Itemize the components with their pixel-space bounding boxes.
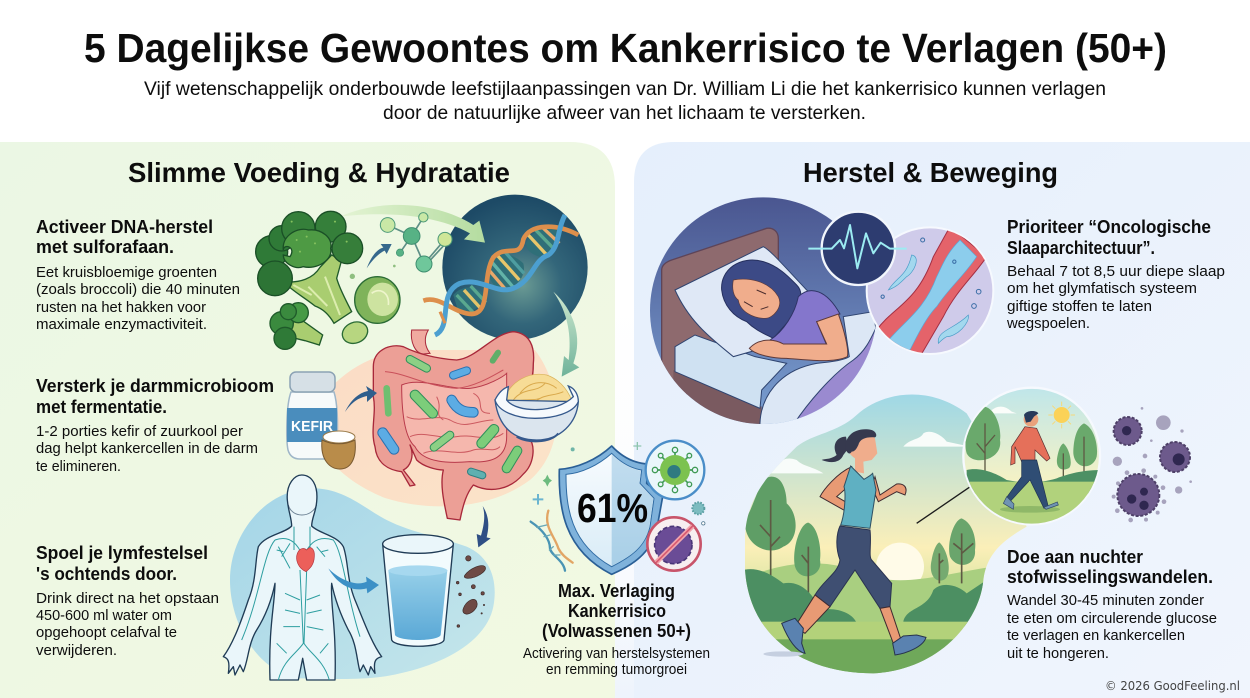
- arrow: dark arrow down: [477, 506, 491, 547]
- icon: heartbeat monitor: [808, 212, 907, 285]
- icon: blanket: [760, 312, 880, 430]
- body: Wandel 30-45 minuten zonder: [1007, 593, 1204, 609]
- heading: Versterk je darmmicrobioom: [36, 376, 274, 396]
- icon: purple blanket fold: [796, 328, 876, 419]
- body: dag helpt kankercellen in de darm: [36, 441, 258, 457]
- illustration: sleeping woman: [650, 197, 993, 430]
- icon: hills: [740, 563, 993, 627]
- body: [1006, 264, 1225, 332]
- illustration: intestine: [373, 330, 578, 520]
- inset trees: [965, 407, 1097, 470]
- body: te eten om circulerende glucose: [1007, 611, 1217, 627]
- subtitle: Vijf wetenschappelijk onderbouwde leefstijlaanpassingen van Dr. William Li die het kankerrisico kunnen verlagen: [144, 78, 1106, 100]
- heading: [36, 217, 213, 257]
- stat label description: [523, 646, 710, 678]
- heading: Activeer DNA-herstel: [36, 217, 213, 237]
- icon: walker inset circle: [963, 388, 1103, 525]
- icon: hair: [722, 260, 801, 338]
- stat label heading: Kankerrisico: [568, 601, 666, 621]
- icon: human body: [223, 475, 382, 680]
- icon: bushes: [740, 569, 987, 627]
- runner rear arm: [820, 467, 865, 518]
- illustration: 61 percent shield: [531, 441, 705, 574]
- illustration: lymph system and water: [223, 475, 495, 680]
- icon: virus lens: [646, 441, 704, 499]
- stat label description: en remming tumorgroei: [546, 662, 687, 678]
- icon: jar body: [287, 392, 338, 459]
- stat label: [523, 581, 710, 678]
- illustration: blue background blob: [230, 488, 495, 679]
- text block: activeer DNA-herstel: [36, 217, 240, 333]
- icon: blocked cancer cell: [647, 517, 701, 571]
- body: te verlagen en kankercellen: [1007, 628, 1185, 644]
- icon: shadow: [763, 651, 803, 657]
- icon: night circle: [650, 197, 877, 424]
- body: Drink direct na het opstaan: [36, 591, 219, 607]
- text block: oncologische slaaparchitectuur: [1006, 217, 1225, 332]
- text block: versterk je darmmicrobioom: [36, 376, 274, 475]
- heading: [1007, 217, 1211, 258]
- icon: sprout slice: [339, 318, 371, 347]
- icon: headboard: [662, 228, 778, 397]
- text block: stofwisselingswandelen: [1007, 547, 1217, 662]
- icon: teal germ: [692, 502, 704, 514]
- runner front arm: [872, 477, 906, 502]
- heading: Slaaparchitectuur”.: [1007, 238, 1155, 258]
- icon: molecule: [380, 213, 452, 272]
- icon: DNA mini: [531, 511, 573, 571]
- heading: Prioriteer “Oncologische: [1007, 217, 1211, 237]
- body: 450-600 ml water om: [36, 608, 172, 624]
- heading: herstel en beweging: Herstel & Beweging: [803, 157, 1058, 188]
- body: maximale enzymactiviteit.: [36, 317, 207, 333]
- icon: trees: [745, 477, 975, 593]
- inset bushes and grass: [967, 469, 1103, 493]
- icon: shield: [559, 446, 663, 574]
- runner ponytail: [822, 437, 848, 462]
- icon: kefir jar: [287, 372, 338, 459]
- heading: Doe aan nuchter: [1007, 547, 1143, 567]
- arrow: kefir to intestine: [345, 386, 377, 412]
- runner leggings: [815, 526, 892, 608]
- body: [1007, 593, 1217, 662]
- stat label heading: Max. Verlaging: [558, 581, 675, 601]
- heading: [36, 543, 208, 584]
- icon: esophagus: [411, 330, 430, 354]
- body: om het glymfatisch systeem: [1007, 281, 1197, 297]
- body: Eet kruisbloemige groenten: [36, 265, 217, 281]
- body: opgehoopt celafval te: [36, 625, 177, 641]
- icon: sparkles: [533, 442, 641, 505]
- runner legs: [795, 595, 902, 643]
- icon: jar label: [287, 408, 337, 442]
- icon: arm: [749, 314, 848, 361]
- heading: [1007, 547, 1213, 587]
- icon: face: [733, 279, 780, 318]
- heading: stofwisselingswandelen.: [1007, 567, 1213, 587]
- inset sun: [1048, 402, 1075, 428]
- text block: spoel je lymfestelsel: [36, 543, 219, 659]
- icon: small broccoli: [270, 303, 323, 349]
- label text: KEFIR: [291, 418, 333, 435]
- broccoli stem: [283, 255, 352, 323]
- icon: jar lid: [290, 372, 335, 392]
- subtitle: [144, 78, 1106, 124]
- heading: met sulforafaan.: [36, 237, 174, 257]
- icon: DNA helix: [423, 215, 578, 335]
- icon: large broccoli: [256, 211, 363, 323]
- icon: grass path: [761, 622, 968, 640]
- icon: colon outline: [373, 332, 534, 520]
- illustration: park background blob: [745, 395, 1027, 673]
- arrow: green arrow to intestine: [553, 292, 579, 377]
- icon: shield inner: [566, 453, 654, 567]
- icon: heart: [297, 548, 314, 572]
- icon: runner woman: [782, 429, 926, 655]
- inset walker: [1003, 411, 1058, 509]
- stat label heading: (Volwassenen 50+): [542, 621, 691, 641]
- icon: cell debris: [456, 556, 486, 627]
- body: [36, 424, 258, 475]
- icon: DNA circle background: [442, 195, 588, 340]
- body: rusten na het hakken voor: [36, 300, 206, 316]
- body: giftige stoffen te laten: [1007, 299, 1152, 315]
- stat label description: Activering van herstelsystemen: [523, 646, 710, 662]
- body: (zoals broccoli) die 40 minuten: [36, 282, 240, 298]
- arrow: green arc to DNA: [340, 205, 485, 243]
- body: uit te hongeren.: [1007, 646, 1109, 662]
- icon: gut bacteria: [383, 353, 517, 475]
- icon: bed base: [673, 370, 762, 430]
- broccoli florets: [256, 211, 363, 296]
- body: Behaal 7 tot 8,5 uur diepe slaap: [1007, 264, 1225, 280]
- body: verwijderen.: [36, 643, 117, 659]
- icon: mattress: [675, 335, 787, 408]
- icon: cancer cells: [1112, 407, 1192, 522]
- icon: shield right half: [612, 454, 653, 566]
- heading: slimme voeding: Slimme Voeding & Hydratatie: [128, 157, 510, 188]
- icon: glass of water: [383, 535, 453, 646]
- runner shoes: [782, 618, 805, 653]
- icon: clouds: [770, 432, 970, 473]
- panel: slimme voeding en hydratatie: [0, 142, 615, 698]
- heading: Spoel je lymfestelsel: [36, 543, 208, 563]
- icon: vessel circle: [867, 227, 993, 357]
- icon: pillow: [674, 246, 808, 358]
- stat label heading: [542, 581, 691, 641]
- runner tank top: [841, 466, 876, 528]
- copyright: © 2026 GoodFeeling.nl: [1105, 678, 1240, 693]
- illustration: broccoli, molecule and DNA: [256, 195, 588, 377]
- body: 1-2 porties kefir of zuurkool per: [36, 424, 243, 440]
- body: [36, 265, 240, 333]
- connector line: [917, 487, 969, 523]
- body: wegspoelen.: [1006, 316, 1090, 332]
- icon: sun: [876, 542, 924, 580]
- illustration: runner in park: [740, 388, 1192, 679]
- heading: 's ochtends door.: [36, 564, 177, 584]
- arrow: body to glass: [328, 568, 379, 593]
- stat: 61 percent: 61%: [577, 485, 648, 531]
- inset cloud: [990, 407, 1017, 413]
- icon: sauerkraut bowl: [495, 374, 578, 441]
- arrow: small dark arrow to molecule: [367, 244, 392, 268]
- body: [36, 591, 219, 659]
- icon: small intestine: [402, 373, 507, 462]
- title: 5 Dagelijkse Gewoontes om Kankerrisico te Verlagen (50+): [84, 25, 1167, 71]
- heading: [36, 376, 274, 417]
- body: te elimineren.: [36, 459, 121, 475]
- panel: herstel en beweging: [634, 142, 1250, 698]
- illustration: peach background blob: [315, 350, 557, 506]
- runner head: [847, 432, 877, 473]
- icon: small bowl with yogurt: [322, 431, 355, 469]
- icon: shirt: [770, 291, 840, 347]
- heading: met fermentatie.: [36, 397, 167, 417]
- icon: brussels sprout: [355, 277, 400, 323]
- subtitle: door de natuurlijke afweer van het lichaam te versterken.: [383, 102, 866, 124]
